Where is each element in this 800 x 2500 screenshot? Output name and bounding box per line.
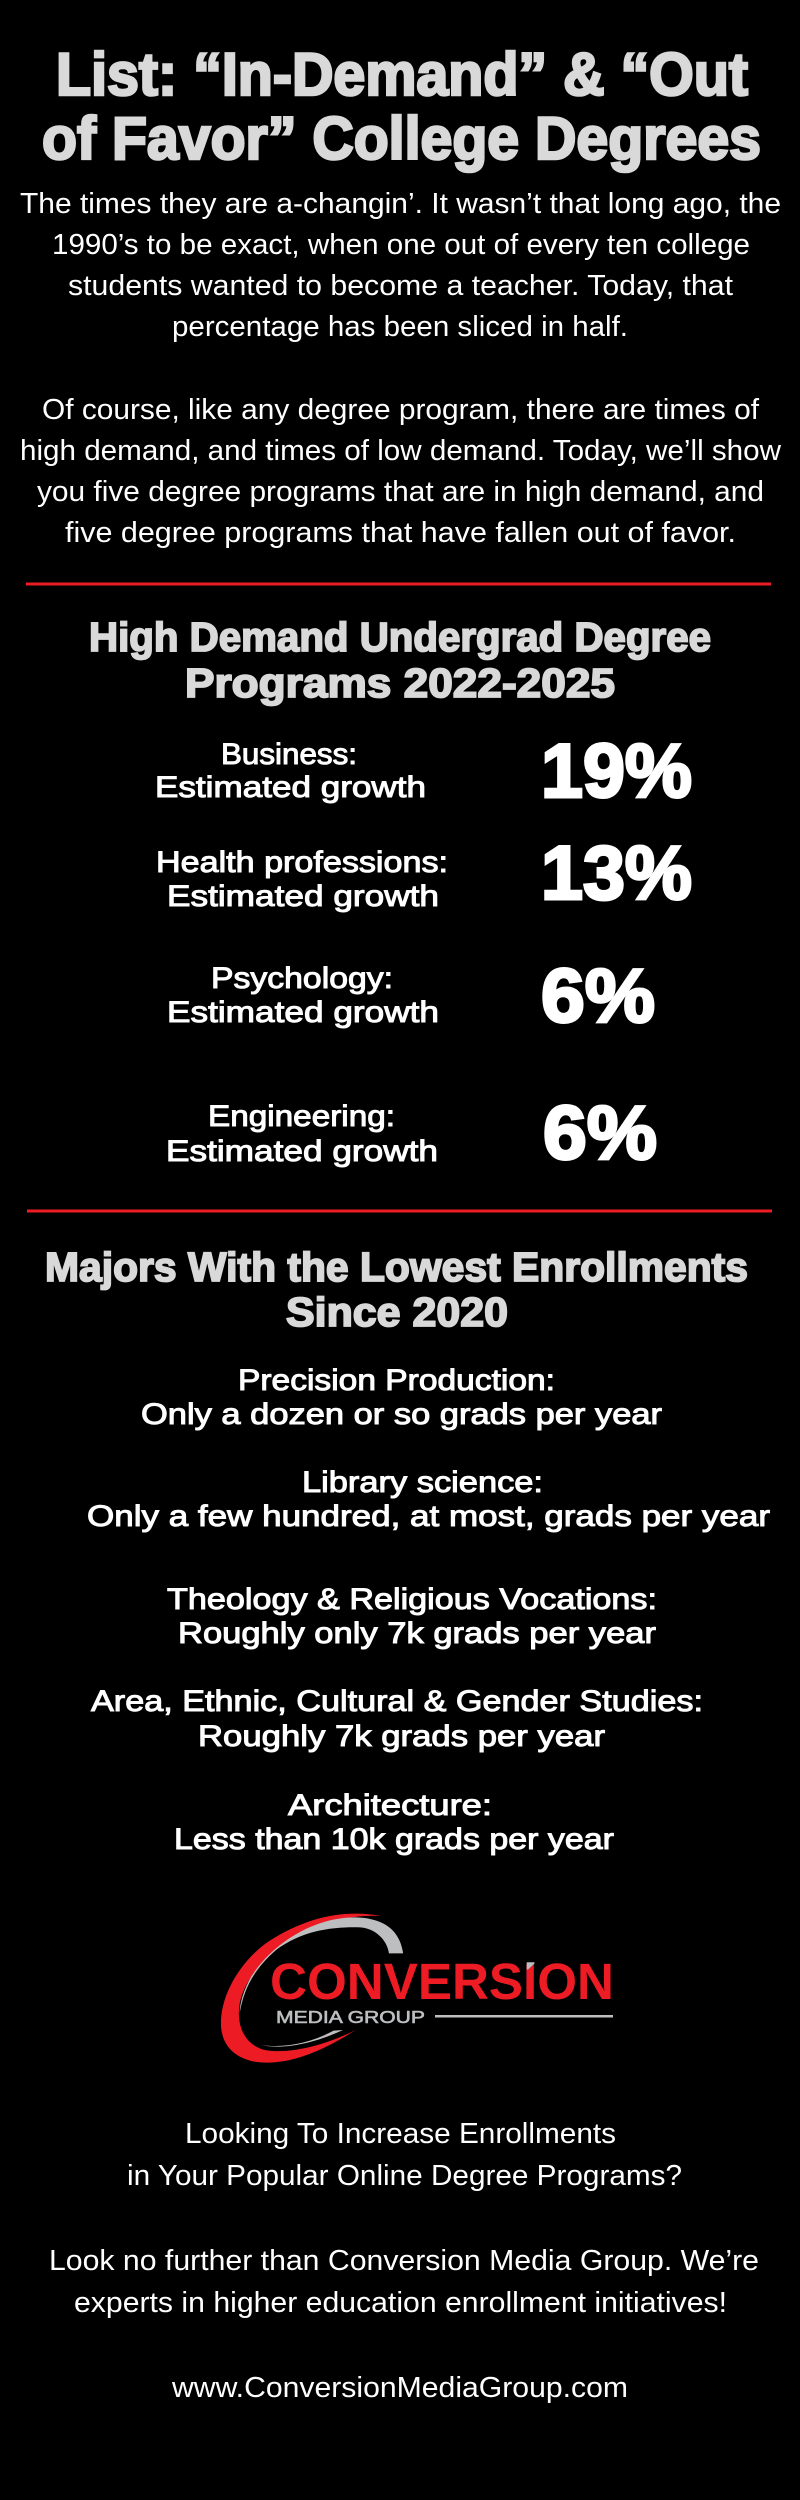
logo: Conversion Media Group: [221, 1914, 614, 2063]
row: health professions: Estimated growth: [167, 880, 439, 913]
text block: call to action: Look no further than Conversion Media Group. We’re: [49, 2245, 759, 2277]
website address: www.ConversionMediaGroup.com: [171, 2372, 628, 2404]
heading: high demand: [89, 614, 711, 706]
logo: Conversion Media Group: MEDIA GROUP: [276, 2007, 425, 2027]
item: theology: Roughly only 7k grads per year: [178, 1617, 656, 1650]
row: health professions: 13%: [541, 831, 692, 916]
row: business: [155, 729, 692, 814]
text block: introduction: [20, 188, 782, 549]
text block: introduction: you five degree programs that are in high demand, and: [37, 476, 764, 508]
text block: call to action: Looking To Increase Enrollments: [185, 2118, 616, 2150]
item: architecture: Architecture:: [288, 1789, 492, 1822]
row: engineering: Estimated growth: [166, 1135, 438, 1168]
item: theology: Theology & Religious Vocations:: [167, 1583, 657, 1616]
title: [42, 41, 761, 172]
row: engineering: Engineering:: [208, 1100, 395, 1133]
item: precision production: [141, 1364, 662, 1431]
row: business: 19%: [541, 729, 692, 814]
text block: introduction: five degree programs that have fallen out of favor.: [65, 517, 736, 549]
text block: introduction: students wanted to become a teacher. Today, that: [68, 270, 733, 302]
item: architecture: Less than 10k grads per year: [174, 1823, 614, 1856]
text block: introduction: 1990’s to be exact, when one out of every ten college: [52, 229, 750, 261]
item: area studies: [91, 1685, 703, 1753]
item: library science: [87, 1466, 770, 1533]
text block: call to action: experts in higher education enrollment initiatives!: [74, 2287, 727, 2319]
item: architecture: [174, 1789, 614, 1856]
text block: introduction: The times they are a-changin’. It wasn’t that long ago, the: [20, 188, 781, 220]
heading: lowest enrollments: [45, 1244, 748, 1335]
item: area studies: Roughly 7k grads per year: [198, 1720, 605, 1753]
row: psychology: [167, 954, 655, 1039]
text block: introduction: Of course, like any degree program, there are times of: [42, 394, 760, 426]
row: psychology: Psychology:: [211, 962, 393, 995]
row: health professions: [156, 831, 692, 916]
item: theology: [167, 1583, 657, 1650]
heading: high demand: High Demand Undergrad Degree: [89, 614, 711, 660]
heading: high demand: Programs 2022-2025: [185, 660, 615, 706]
row: psychology: 6%: [541, 954, 655, 1039]
item: precision production: Only a dozen or so grads per year: [141, 1398, 662, 1431]
text block: introduction: high demand, and times of low demand. Today, we’ll show: [20, 435, 782, 467]
item: library science: Only a few hundred, at most, grads per year: [87, 1500, 770, 1533]
item: library science: Library science:: [302, 1466, 543, 1499]
text block: call to action: in Your Popular Online Degree Programs?: [127, 2160, 682, 2192]
row: engineering: 6%: [543, 1091, 657, 1176]
logo: Conversion Media Group: CONVERSION: [270, 1953, 614, 2010]
heading: lowest enrollments: Majors With the Lowest Enrollments: [45, 1244, 748, 1290]
row: health professions: Health professions:: [156, 846, 448, 879]
icon: accent on logo letter: [527, 1962, 534, 1970]
item: area studies: Area, Ethnic, Cultural & Gender Studies:: [91, 1685, 703, 1718]
row: engineering: [166, 1091, 657, 1176]
text block: introduction: percentage has been sliced in half.: [172, 311, 628, 343]
title: of Favor” College Degrees: [42, 105, 761, 172]
heading: lowest enrollments: Since 2020: [286, 1289, 508, 1335]
panel: lowest enrollment majors: [45, 1244, 770, 1856]
panel: high demand degrees: [89, 614, 711, 1176]
item: precision production: Precision Production:: [238, 1364, 555, 1397]
row: psychology: Estimated growth: [167, 996, 439, 1029]
row: business: Business:: [221, 738, 357, 771]
title: List: “In-Demand” & “Out: [56, 41, 748, 108]
row: business: Estimated growth: [155, 771, 426, 804]
text block: call to action: [49, 2118, 759, 2319]
icon: logo swoosh: [221, 1914, 403, 2063]
